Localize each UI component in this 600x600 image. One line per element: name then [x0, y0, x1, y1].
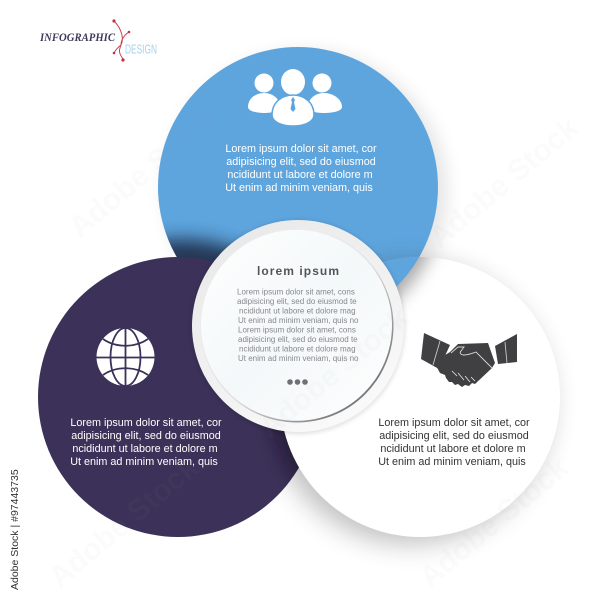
dark text block: Ut enim ad minim veniam, quis [70, 456, 218, 468]
centre text block: adipisicing elit, sed do eiusmod te [237, 297, 357, 306]
centre text block: Ut enim ad minim veniam, quis no [238, 316, 359, 325]
logo [39, 19, 157, 62]
logo: INFOGRAPHIC [39, 30, 116, 44]
watermark: Adobe Stock [43, 451, 205, 594]
centre text block: Lorem ipsum dolor sit amet, cons [237, 288, 355, 296]
panel: blue circle [158, 47, 450, 262]
icon: people [248, 69, 342, 126]
dark text block: adipisicing elit, sed do eiusmod [71, 430, 221, 442]
shadow of white circle on dark [268, 428, 299, 480]
panel: centre circle [191, 220, 405, 434]
blue text block: Lorem ipsum dolor sit amet, cor [225, 143, 377, 155]
watermark: Adobe Stock [423, 111, 585, 254]
white text block [378, 417, 530, 468]
shadow of blue circle on white [382, 257, 439, 308]
centre heading: lorem ipsum [257, 264, 339, 278]
stock id label: Adobe Stock | #97443735 [9, 469, 21, 590]
panel: dark circle [38, 257, 299, 537]
centre text block: Ut enim ad minim veniam, quis no [238, 354, 359, 363]
icon: globe [96, 328, 155, 386]
centre text block [237, 288, 359, 363]
centre text block: ncididunt ut labore et dolore mag [239, 306, 356, 316]
shadow of white circle on background [269, 262, 551, 544]
white text block: Ut enim ad minim veniam, quis [378, 456, 526, 468]
blue text block: adipisicing elit, sed do eiusmod [226, 156, 376, 168]
centre text block: ncididunt ut labore et dolore mag [239, 344, 356, 354]
blue text block: Ut enim ad minim veniam, quis [225, 182, 373, 194]
dark text block: Lorem ipsum dolor sit amet, cor [70, 417, 222, 429]
logo: DESIGN [125, 42, 157, 56]
dark text block [70, 417, 222, 468]
blue text block [225, 143, 377, 194]
white text block: ncididunt ut labore et dolore m [380, 443, 526, 455]
panel: white circle [284, 257, 560, 537]
white text block: adipisicing elit, sed do eiusmod [379, 430, 529, 442]
centre dots [287, 379, 308, 385]
watermark: Adobe Stock [63, 101, 225, 244]
watermark: Adobe Stock [253, 301, 415, 444]
centre text block: Lorem ipsum dolor sit amet, cons [238, 326, 356, 334]
blue text block: ncididunt ut labore et dolore m [227, 169, 373, 181]
centre text block: adipisicing elit, sed do eiusmod te [238, 335, 358, 344]
watermark: Adobe Stock [413, 451, 575, 594]
shadow of dark circle on blue [164, 226, 240, 262]
watermark [43, 101, 585, 594]
icon: handshake [421, 333, 517, 387]
white text block: Lorem ipsum dolor sit amet, cor [378, 417, 530, 429]
dark text block: ncididunt ut labore et dolore m [72, 443, 218, 455]
